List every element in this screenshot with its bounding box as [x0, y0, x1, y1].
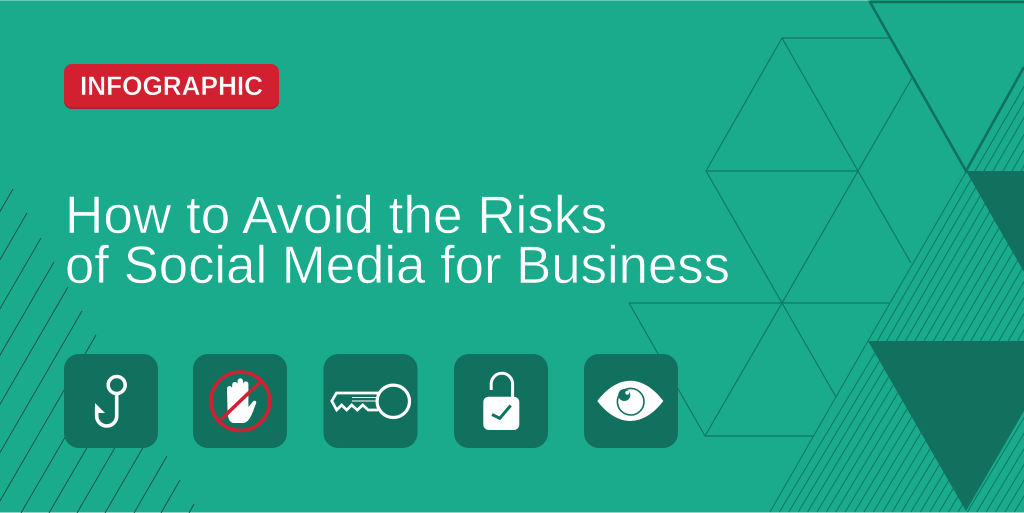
- icon tile: fish hook: [64, 354, 158, 448]
- badge: INFOGRAPHIC: INFOGRAPHIC: [80, 71, 263, 101]
- background: right hatch fields: [770, 71, 1024, 512]
- icon tile: hand with prohibition sign: [193, 354, 287, 448]
- background: left diagonal hatch: [0, 189, 194, 513]
- title: of Social Media for Business: [65, 236, 730, 295]
- title: How to Avoid the Risks: [65, 186, 607, 245]
- dark triangle upper right: [966, 171, 1024, 272]
- icon tile: key: [324, 354, 418, 448]
- title: [65, 186, 730, 295]
- icon tile: eye: [584, 354, 678, 448]
- badge: INFOGRAPHIC: [64, 64, 279, 109]
- background: triangle lattice outline: [629, 38, 912, 436]
- dark triangle lower right: [868, 341, 1024, 511]
- large outlined triangle: [870, 2, 1024, 171]
- icon tile: open padlock with check: [454, 354, 548, 448]
